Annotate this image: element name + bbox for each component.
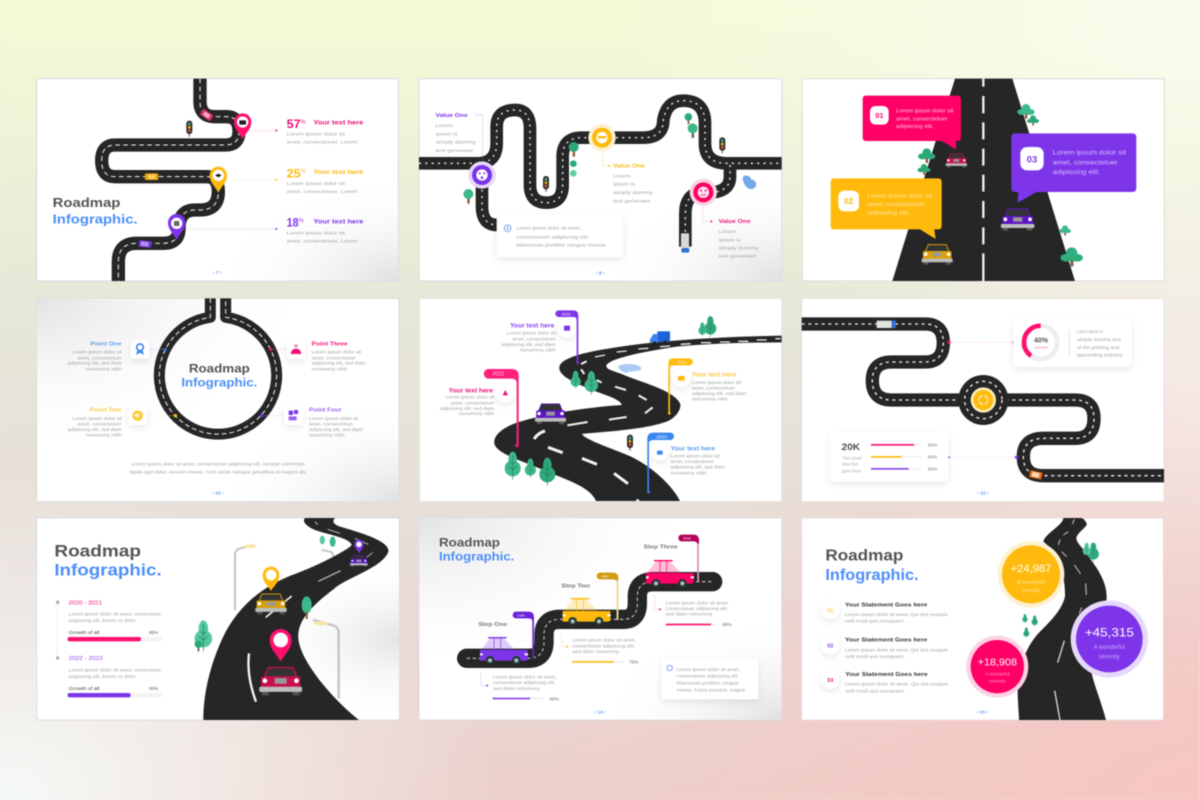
card: bars: 60%: [928, 443, 937, 448]
heading: Infographic.: [181, 376, 257, 390]
icons: traffic lights: [543, 137, 725, 192]
statement 02: 02: [827, 644, 833, 650]
callout: 01: adipiscing elit.: [896, 124, 934, 130]
point two: Lorem ipsum dolor sit: [72, 416, 122, 422]
panel: slide 9, straight road with speech bubbles: [802, 79, 1164, 281]
item: 57%: amet, consectetuer. Lorem: [287, 140, 358, 146]
statement 03: velit modi quo numquam.: [845, 688, 905, 694]
flag: 2023: Your text here: [671, 445, 715, 452]
block: 2020-2021: adipiscing elit. Donec ut dolor: [69, 618, 136, 624]
statement 01: 01: [827, 608, 833, 614]
panel: slide 7, winding road with pins: [37, 79, 398, 281]
flag: crimson: [678, 535, 699, 582]
callout: 01: Lorem ipsum dolor sit: [896, 109, 954, 115]
icon: pink pin: [270, 629, 292, 662]
callout card: Lorem ipsum dolor sit amet,: [516, 226, 581, 232]
callout: 02: [831, 178, 942, 239]
road: [892, 79, 1075, 281]
icon: purple car: [535, 404, 566, 424]
point three: [269, 340, 366, 372]
item: 25%: Lorem ipsum dolor sit: [287, 181, 346, 187]
point four: Lorem ipsum dolor sit: [309, 416, 359, 422]
stat circle: +45,315: +45,315: [1085, 626, 1134, 640]
flag: 2021: [668, 358, 746, 415]
icons: pine trees: [505, 316, 716, 486]
item: 57%: 57: [287, 117, 301, 131]
card: bars: goes here: [842, 468, 862, 473]
block: 2022-2023: 2022 - 2023: [69, 656, 103, 662]
flag: 2023: Lorem ipsum dolor sit: [671, 454, 720, 459]
text: value one yellow: Lorem: [613, 173, 630, 179]
stat circle: +24,987: +24,987: [1011, 563, 1051, 575]
item: 18%: Lorem ipsum dolor sit: [287, 230, 346, 236]
card: bars: 20K: [842, 442, 861, 452]
icons: trees: [1022, 542, 1099, 638]
point one: amet, consectetuer: [78, 355, 122, 361]
icon: pond: [618, 364, 641, 373]
icon: orange car: [1029, 470, 1043, 480]
flag: 2020: Lorem ipsum dolor sit: [507, 331, 556, 336]
card: donut: [1013, 318, 1132, 367]
callout: 03: adipiscing elit.: [1053, 169, 1101, 176]
flag: yellow: Adv: [602, 573, 608, 578]
callout card: Maecenas porttitor congue: [677, 681, 739, 687]
flag: 2023: amet, consectetuer: [671, 459, 714, 464]
flag: 2020: Your text here: [510, 323, 555, 330]
text block: step three: consectetuer adipiscing elit,: [666, 606, 728, 612]
card: bars: 60%: [928, 467, 937, 472]
heading: Infographic.: [439, 550, 514, 564]
statement 03: [821, 671, 949, 694]
text block: step one: [481, 672, 559, 701]
text: value one yellow: text generator: [613, 198, 651, 204]
statement 03: Your Statement Goes here: [845, 672, 928, 678]
panel: slide 13, curved road with lamps and growth bars: [37, 518, 399, 720]
text: value one pink: Value One: [719, 219, 751, 225]
marker: purple face: [468, 161, 496, 189]
card: donut: of the printing and: [1077, 345, 1120, 351]
block: 2020-2021: Growth of all: [69, 630, 99, 635]
callout card: Lorem ipsum dolor sit amet,: [677, 667, 740, 673]
item: 25%: Your text here: [313, 169, 364, 176]
card: bars: [830, 432, 948, 482]
card: donut: success: [1034, 346, 1048, 350]
road: [1018, 518, 1107, 720]
statement 03: Lorem ipsum dolor sit amet. Qui sint nesquis: [845, 682, 949, 688]
heading: Infographic.: [825, 567, 919, 584]
icon: truck: [681, 233, 689, 253]
lamp posts behind road: [235, 545, 333, 610]
icon: pond: [743, 176, 756, 189]
block: 2022-2023: Lorem ipsum dolor sit amet, consectetur: [69, 667, 161, 673]
flag: 2021: 2021: [678, 359, 688, 364]
text block: step two: Lorem ipsum dolor sit amet,: [572, 638, 636, 644]
icon: traffic light: [186, 121, 192, 137]
text: value one yellow: Value One: [613, 164, 645, 170]
stat circle: +45,315: [1071, 600, 1148, 678]
step labels: Step One: [478, 622, 507, 628]
point one: [68, 340, 167, 372]
flag: 2021: amet, consectetuer: [692, 385, 736, 390]
flag: 2020: amet, consectetuer: [512, 336, 556, 341]
icon: yellow car: [922, 245, 953, 265]
block: 2020-2021: 2020 - 2021: [69, 600, 102, 606]
text: value one pink: text generator: [719, 254, 757, 260]
marker: yellow face: [588, 124, 616, 151]
marker: pink face: [690, 179, 717, 206]
panel: slide 11, perspective road with flags: [419, 298, 782, 502]
heading: [181, 361, 257, 390]
flag: 2021: Your text here: [692, 371, 737, 378]
flag: 2023: [647, 433, 725, 493]
road: [494, 336, 782, 501]
heading: Roadmap: [189, 361, 250, 375]
callout: 03: [1011, 133, 1136, 203]
point three: Point Three: [312, 341, 348, 347]
point four: adipiscing elit, sed diam: [309, 427, 363, 433]
text block: step two: sed diam nonummy: [572, 649, 620, 655]
block: 2022-2023: Growth of all: [69, 686, 99, 691]
callout: 02: Lorem ipsum dolor sit: [867, 194, 933, 200]
text block: step three: sed diam nonummy: [666, 612, 713, 618]
point two: amet, consectetuer: [78, 422, 122, 428]
icons: trees: [917, 104, 1083, 266]
text: value one purple: simply dummy: [436, 140, 476, 146]
text block: step one: Lorem ipsum dolor sit amet,: [493, 674, 556, 680]
icon: purple car: [480, 638, 528, 665]
panel: slide 12, roundabout road with stat cards: [802, 298, 1164, 502]
text: value one pink: Ipsum is: [719, 237, 741, 243]
point one: Point One: [90, 341, 122, 347]
flag: purple: Low: [517, 612, 525, 617]
description: ligula eget dolor. Aenean massa. Cum sociis natoque penatibus et magnis dis: [130, 470, 307, 476]
text: value one yellow: Ipsum is: [613, 182, 636, 188]
flag: yellow: [597, 573, 618, 620]
callout card: [497, 214, 623, 257]
road: [802, 324, 1164, 476]
text: value one pink: Lorem: [719, 229, 736, 235]
text block: step three: [655, 596, 732, 627]
flag: 2021: Lorem ipsum dolor sit: [692, 380, 742, 385]
icon: yellow pin: [263, 567, 279, 591]
flag: 2020: nonummy nibh: [520, 347, 556, 352]
callout card: consectetuer adipiscing elit.: [516, 234, 589, 240]
point two: nonummy nibh: [86, 433, 122, 439]
description: [130, 461, 307, 476]
icon: yellow car: [563, 599, 611, 626]
card: bars: Your good: [842, 455, 862, 460]
text: value one yellow: [602, 152, 654, 204]
card: donut: typesetting industry: [1077, 353, 1123, 359]
page number: ‹ 14 ›: [594, 709, 606, 715]
text block: step two: consectetuer adipiscing elit,: [572, 643, 635, 649]
page number: ‹ 8 ›: [596, 270, 605, 276]
block: 2022-2023: [68, 656, 162, 697]
icon: yellow car: [145, 173, 158, 180]
text block: step three: Lorem ipsum dolor sit amet,: [666, 600, 729, 606]
text: value one purple: text generator: [436, 148, 474, 154]
flag: purple: [513, 612, 534, 658]
callout: 03: 03: [1027, 155, 1037, 165]
stat circle: +45,315: A wonderful: [1094, 645, 1125, 651]
heading: Roadmap: [825, 548, 903, 565]
card: bars: 80%: [928, 455, 937, 460]
icon: purple pin: [168, 214, 185, 240]
point four: nonummy nibh: [309, 433, 345, 439]
card: bars: idea text: [842, 462, 859, 467]
item: 57%: [251, 117, 364, 146]
item: 57%: %: [301, 119, 306, 125]
stat circle: +18,908: A wonderful: [985, 672, 1010, 677]
flag: 2022: Lorem ipsum dolor sit: [445, 395, 495, 400]
callout card: Maecenas porttitor congue massa.: [516, 243, 607, 249]
block: 2020-2021: Lorem ipsum dolor sit amet, consectetur: [69, 611, 161, 617]
heading: Infographic.: [54, 560, 162, 579]
point four: [260, 406, 363, 439]
road: [203, 518, 388, 720]
flag: 2022: amet, consectetuer: [451, 400, 495, 405]
flag: 2022: nonummy nibh: [459, 411, 495, 416]
road: [419, 101, 782, 247]
callout: 02: adipiscing elit.: [867, 211, 910, 217]
heading: [825, 548, 919, 584]
icon: purple car: [350, 555, 368, 567]
panel: slide 10, circular road: [37, 298, 399, 502]
block: 2020-2021: 85%: [149, 630, 158, 635]
stat circle: +18,908: serenity: [989, 679, 1006, 684]
heading: [439, 536, 514, 564]
text: value one purple: Ipsum is: [436, 131, 458, 137]
card: donut: 40%: [1034, 337, 1049, 344]
item: 25%: %: [301, 169, 306, 175]
point one: nonummy nibh: [86, 366, 122, 372]
icon: yellow pin: [210, 167, 227, 193]
lamp post right: [313, 620, 339, 698]
heading: Roadmap: [54, 541, 141, 560]
callout: 03: amet, consectetuer: [1053, 159, 1118, 166]
panel: slide 14, stepped road with side-view cars: [419, 518, 782, 720]
icon: pink pin: [234, 113, 251, 139]
point three: nonummy nibh: [312, 366, 348, 372]
point one: adipiscing elit, sed diam: [68, 361, 122, 367]
card: donut: simply dummy text: [1077, 337, 1122, 343]
heading: [54, 541, 162, 579]
card: donut: Lorem Ipsum is: [1077, 329, 1103, 335]
stat circle: +24,987: A wonderful: [1017, 580, 1045, 586]
callout: 02: 02: [844, 196, 854, 206]
page number: ‹ 7 ›: [213, 270, 222, 276]
text: value one purple: [436, 113, 483, 162]
flag: crimson: End: [683, 535, 691, 540]
flag: 2020: [501, 310, 579, 364]
icon: blue truck: [650, 331, 670, 345]
statement 01: [821, 601, 948, 625]
item: 57%: Your text here: [313, 120, 364, 127]
point four: Point Four: [309, 407, 343, 413]
icon: purple car: [138, 240, 152, 248]
point two: adipiscing elit, sed diam: [68, 427, 122, 433]
statement 01: Lorem ipsum dolor sit amet. Qui sint nesquis: [845, 612, 948, 618]
icon: yellow car: [255, 594, 287, 614]
connector: pink: [947, 341, 1014, 344]
icon: pink car: [200, 109, 213, 121]
step labels: [478, 545, 678, 628]
text: value one yellow: simply dummy: [613, 190, 654, 196]
flag: 2022: 2022: [492, 372, 504, 378]
icon: pink car: [646, 561, 694, 588]
point four: amet, consectetuer: [309, 422, 353, 428]
timeline: [56, 601, 59, 660]
item: 18%: [187, 216, 364, 244]
callout card: consectetuer adipiscing elit.: [677, 673, 739, 679]
callout: 03: Lorem ipsum dolor sit: [1053, 150, 1126, 157]
icon: crimson car: [259, 668, 302, 695]
flag: 2020: 2020: [562, 311, 571, 316]
flag: 2023: adipiscing elit, sed diam: [671, 465, 725, 470]
heading: Roadmap: [439, 536, 500, 550]
statement 02: Lorem ipsum dolor sit amet. Qui sint nesquis: [845, 647, 948, 653]
callout: 02: amet, consectetuer: [867, 202, 925, 208]
panel: slide 8, road with face markers: [419, 79, 782, 281]
stat circle: +18,908: [966, 636, 1028, 698]
step labels: Step Two: [561, 583, 591, 589]
text block: step two: 75%: [629, 659, 638, 664]
icons: trees: [463, 113, 698, 204]
text block: step two: [562, 633, 638, 664]
circular road: [159, 298, 277, 434]
flag: 2023: nonummy nibh: [671, 470, 707, 475]
connector: purple: [948, 456, 1018, 459]
step labels: Step Three: [644, 545, 678, 551]
heading: [53, 195, 138, 226]
statement 01: Your Statement Goes here: [845, 602, 927, 608]
flag: 2020: adipiscing elit, sed diam: [501, 342, 556, 347]
flag: 2022: adipiscing elit, sed diam: [440, 406, 494, 411]
panel: slide 15, road with stat circles: [802, 518, 1163, 720]
heading: Roadmap: [53, 195, 120, 210]
stat circle: +24,987: serenity: [1022, 588, 1041, 594]
stat circle: +45,315: serenity: [1099, 655, 1120, 661]
icon: crimson car: [946, 154, 967, 168]
flag: 2022: [440, 369, 519, 447]
statement 02: velit modi quo numquam.: [845, 654, 905, 660]
statement 02: [821, 637, 948, 660]
icon: purple car: [1001, 209, 1034, 231]
text block: step three: 90%: [722, 622, 732, 627]
point three: adipiscing elit, sed diam: [312, 361, 366, 367]
icon: traffic light: [627, 435, 633, 451]
icons: trees: [195, 536, 336, 651]
item: 25%: [228, 166, 364, 195]
item: 57%: Lorem ipsum dolor sit: [287, 132, 346, 138]
flag: 2021: adipiscing elit, sed diam: [692, 391, 746, 396]
page number: ‹ 15 ›: [977, 709, 988, 715]
item: 25%: 25: [287, 166, 301, 180]
statement 02: Your Statement Goes here: [845, 638, 927, 644]
page number: ‹ 12 ›: [977, 490, 989, 496]
point three: amet, consectetuer: [312, 355, 356, 361]
icon: truck: [877, 320, 896, 328]
page number: ‹ 10 ›: [212, 490, 224, 496]
text: value one pink: simply dummy: [719, 245, 759, 251]
text block: step one: consectetuer adipiscing elit,: [493, 680, 555, 686]
flag: 2021: nonummy nibh: [692, 396, 728, 401]
item: 18%: amet, consectetuer. Lorem: [287, 238, 358, 244]
stat circle: +18,908: +18,908: [978, 657, 1017, 668]
item: 18%: Your text here: [313, 218, 364, 225]
icon: purple pin: [354, 540, 364, 553]
block: 2022-2023: 50%: [149, 686, 158, 691]
road: [102, 79, 239, 281]
text: value one purple: Lorem: [436, 123, 453, 129]
callout: 01: 01: [875, 111, 883, 120]
text: value one pink: [703, 207, 759, 260]
item: 18%: %: [299, 218, 304, 224]
point two: Point Two: [90, 407, 122, 413]
block: 2020-2021: [68, 600, 162, 641]
flag: 2023: 2023: [656, 435, 667, 440]
description: Lorem ipsum dolor sit amet, consectetuer adipiscing elit. Aenean commodo: [131, 461, 305, 467]
heading: Infographic.: [53, 211, 138, 226]
text block: step one: sed diam nonummy: [493, 686, 540, 692]
callout: 01: amet, consectetuer: [896, 116, 948, 122]
point three: Lorem ipsum dolor sit: [312, 350, 362, 356]
text: value one purple: Value One: [436, 113, 468, 119]
callout card: [662, 659, 758, 699]
point two: [68, 406, 177, 439]
block: 2022-2023: adipiscing elit. Donec ut dolor: [69, 674, 136, 680]
callout: 01: [863, 96, 961, 149]
point one: Lorem ipsum dolor sit: [72, 350, 122, 356]
statement 01: velit modi quo numquam.: [845, 619, 905, 625]
roundabout: [958, 375, 1008, 425]
text block: step one: 60%: [550, 696, 559, 701]
statement 03: 03: [827, 678, 833, 684]
callout card: massa. Fusce posuere, magna: [677, 688, 745, 694]
item: 18%: 18: [287, 216, 299, 230]
item: 25%: amet, consectetuer. Lorem: [287, 189, 358, 195]
stat circle: +24,987: [998, 541, 1064, 608]
flag: 2022: Your text here: [449, 387, 493, 394]
road: [467, 582, 713, 658]
